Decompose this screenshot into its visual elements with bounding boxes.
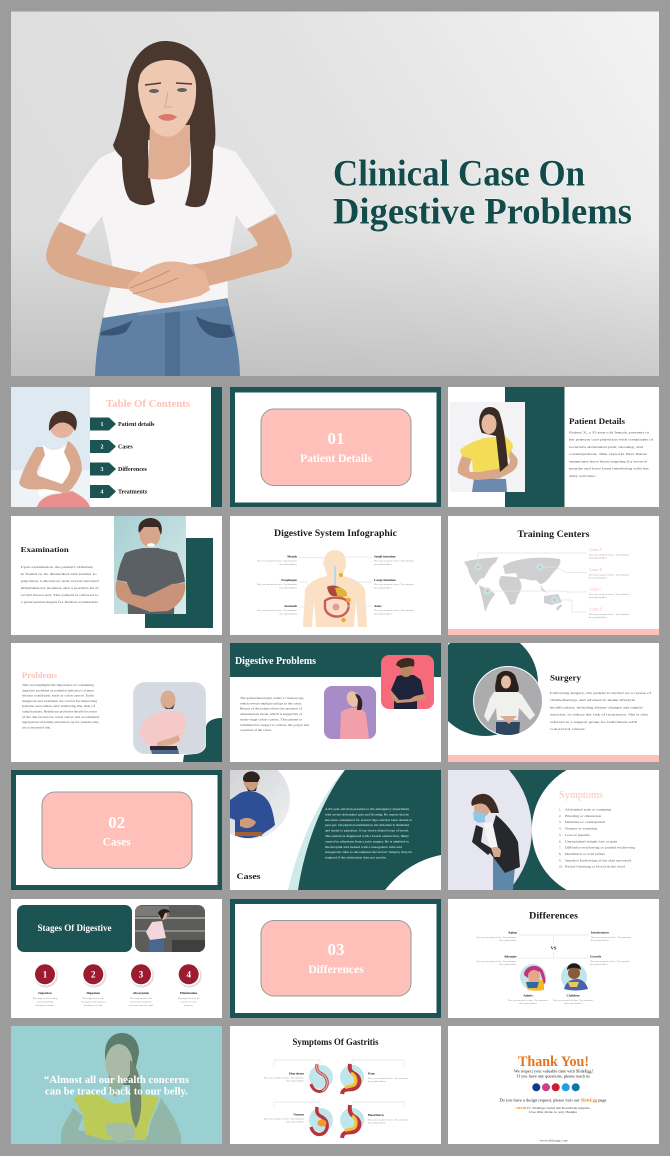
- paragraph: which reveals multiple polyps in the colon.: [240, 701, 302, 705]
- stage circles: 3: [139, 970, 144, 980]
- panel: patient details: Patient Details: [569, 416, 626, 426]
- contents list: 1: [100, 422, 104, 428]
- symptom list: 2.: [559, 814, 562, 818]
- photo: woman with teal overlay: [61, 1033, 181, 1144]
- photo: man in grey t-shirt: [114, 516, 186, 614]
- paragraph: are at increased risk.: [22, 725, 51, 729]
- paragraph: A 65-year-old man presents to the emergency department: [325, 807, 409, 811]
- paragraph: required if the obstruction does not resolve.: [325, 856, 387, 860]
- labels: Here you can put text here. Try customize: [368, 1118, 408, 1122]
- contents list: Differences: [118, 467, 148, 473]
- labels: Here you can put text here. Try customize: [264, 1076, 304, 1080]
- title: Clinical Case On: [333, 154, 585, 194]
- avatar captions: Children: [567, 994, 580, 998]
- center labels: Here you can put text here. Try customize: [589, 554, 629, 556]
- panel: digestive system infographic: Digestive System Infographic: [274, 529, 397, 539]
- contents list: Cases: [118, 445, 133, 451]
- panel: thank you: Thank You!: [518, 1054, 589, 1070]
- panel: problems: [11, 643, 222, 762]
- labels: these placeholders: [499, 963, 517, 966]
- paragraph: [569, 430, 654, 478]
- paragraph: adenomatous tissue, which is suggestive of: [240, 712, 303, 717]
- paragraph: chemotherapy and advised to make lifestyle: [550, 698, 636, 702]
- paragraph: [550, 691, 652, 731]
- panel: section 03 divider: [230, 899, 441, 1018]
- connector brackets: [274, 1060, 404, 1108]
- photo: woman with face mask: [471, 794, 520, 890]
- paragraph: daily activities.: [569, 474, 596, 478]
- photo: man in blue sweater: [230, 771, 275, 838]
- paragraph: her primary care physician with complaints of: [569, 438, 654, 442]
- center labels: Center B: [589, 568, 602, 572]
- labels: these placeholders: [368, 1080, 386, 1083]
- contents list: 2: [100, 445, 104, 451]
- panel: surgery: [448, 643, 659, 762]
- panel: thank you: Do you have a design request, please visit our SlideEgg page: [500, 1098, 607, 1104]
- comparison lines: [518, 935, 589, 958]
- photo: woman on purple: [324, 686, 376, 739]
- labels: Diarrhoea: [289, 1072, 304, 1076]
- panel: section 03 divider: Differences: [308, 964, 364, 976]
- stage labels: Ingestion: [38, 991, 52, 995]
- paragraph: digestive problems as potential indicators of more: [22, 688, 95, 692]
- contents list: [90, 418, 155, 498]
- labels right: these placeholders: [374, 563, 392, 566]
- icon: stomach nausea: [309, 1107, 333, 1134]
- labels: Intolerances: [591, 930, 610, 934]
- paragraph: [21, 565, 99, 604]
- map markers: [474, 563, 558, 604]
- panel: thank you: We respect your valuable time with SlideEgg!: [514, 1070, 593, 1074]
- heading: Table Of Contents: [106, 399, 190, 410]
- stage labels: through the mouth.: [36, 1004, 55, 1007]
- avatar captions: [508, 994, 593, 1005]
- panel: section 02 divider: 02: [108, 813, 125, 832]
- labels: these placeholders: [499, 939, 517, 942]
- labels: Here you can put text here. Try customize: [477, 960, 517, 963]
- labels right: these placeholders: [374, 612, 392, 616]
- stage labels: This stage involves the: [130, 997, 152, 1000]
- labels: Here you can put text here. Try customize: [590, 960, 630, 963]
- labels right: [374, 554, 414, 616]
- panel: quote: can be traced back to our belly.: [45, 1086, 189, 1098]
- body diagram: [303, 550, 367, 627]
- panel: cases: [230, 770, 441, 890]
- panel: stages of digestive: Stages Of Digestive: [38, 923, 112, 933]
- paragraph: inflammatory markers and a positive fecal: [21, 586, 99, 590]
- paragraph: [240, 696, 310, 732]
- labels left: [257, 554, 298, 616]
- stage labels: and water from the small: [129, 1004, 153, 1007]
- stage labels: products.: [184, 1004, 194, 1007]
- labels right: Here you can put text here. Try customize: [374, 560, 414, 562]
- social icons: [532, 1083, 580, 1091]
- paragraph: colorectal cancer.: [550, 727, 586, 731]
- paragraph: Biopsy of the polyps shows the presence of: [240, 707, 303, 711]
- labels left: Stomach: [284, 604, 297, 608]
- paragraph: of the risk factors for colon cancer and recommend: [22, 715, 100, 719]
- paragraph: The gastroenterologist orders a colonoscopy,: [240, 696, 304, 701]
- avatar captions: Here you can put text here. Try customize: [553, 999, 593, 1002]
- photo: woman holding stomach: [46, 41, 292, 376]
- avatar captions: these placeholders: [519, 1002, 537, 1005]
- labels: Here you can put text here. Try customize: [477, 936, 517, 939]
- labels left: Here you can put text here. Try customize: [257, 609, 297, 612]
- symptom list: 5.: [559, 833, 562, 837]
- symptom list: 10.: [559, 865, 563, 869]
- panel: section 01 divider: Patient Details: [300, 453, 372, 465]
- paragraph: Upon examination, the patient's abdomen: [21, 565, 93, 570]
- center labels: Here you can put text here. Try customize: [589, 613, 629, 616]
- labels right: Anus: [374, 604, 382, 608]
- photo: woman in white top: [11, 387, 90, 507]
- center labels: Here you can put text here. Try customize: [589, 574, 629, 576]
- panel: differences: VS: [551, 946, 557, 950]
- center labels: Center D: [589, 608, 602, 612]
- symptom list: [559, 808, 636, 869]
- contents list: 4: [100, 490, 104, 496]
- symptom list: 9.: [559, 858, 562, 862]
- photo: bald man: [132, 682, 206, 754]
- panel: digestive system infographic: [230, 516, 441, 635]
- panel: cases: Cases: [236, 872, 260, 881]
- paragraph: nasogastric tube to decompress the bowel. Surgery may be: [325, 850, 413, 854]
- symptom list: 1.: [559, 808, 562, 812]
- panel: differences: Differences: [529, 912, 578, 922]
- photo: man on pink: [381, 655, 434, 709]
- stage labels: Elimination: [180, 991, 197, 995]
- paragraph: early-stage colon cancer. The patient is: [240, 718, 303, 722]
- paragraph: The patient is diagnosed with a bowel obstruction, likely: [325, 834, 410, 839]
- labels: Here you can put text here. Try customize: [264, 1118, 304, 1120]
- center labels: these placeholders: [589, 576, 607, 580]
- paragraph: diagnosis and treatment are crucial for improving: [22, 699, 98, 703]
- stage labels: Absorption: [133, 991, 149, 995]
- symptom list: 4.: [559, 827, 562, 831]
- contents list: Treatments: [118, 490, 148, 496]
- symptom list: Unexplained weight loss or gain: [565, 839, 618, 843]
- symptom list: Loss of appetite: [565, 833, 591, 837]
- panel: differences: [448, 899, 659, 1018]
- symptom list: Abdominal pain or cramping: [565, 808, 612, 812]
- symptom list: 8.: [559, 852, 562, 856]
- labels: [264, 1072, 408, 1124]
- connector lines: [478, 553, 587, 612]
- paragraph: scheduled for surgery to remove the polyps and: [240, 723, 310, 727]
- paragraph: patient outcomes and reducing the risk of: [22, 704, 96, 708]
- contents list: Patient details: [118, 422, 155, 428]
- panel: thank you: If you have any questions, please reach us: [517, 1074, 591, 1080]
- panel: examination: [11, 516, 222, 635]
- labels: Heartburn: [368, 1113, 384, 1117]
- paragraph: serious conditions, such as colon cancer. Early: [22, 694, 95, 699]
- center labels: these placeholders: [589, 556, 607, 560]
- panel: patient details: [448, 387, 659, 507]
- panel: thank you: Use this slide to say thanks: [529, 1111, 577, 1114]
- labels: these placeholders: [591, 939, 609, 942]
- panel: surgery: Surgery: [550, 674, 581, 683]
- symptom list: Nausea or vomiting: [565, 827, 598, 831]
- panel: digestive problems: Digestive Problems: [235, 656, 316, 667]
- symptom list: Difficulty swallowing or painful swallowing: [565, 846, 636, 850]
- panel: symptoms of gastritis: Symptoms Of Gastritis: [292, 1037, 379, 1047]
- world map: [464, 557, 562, 612]
- paragraph: exercise, to reduce her risk of recurrence. She is also: [550, 713, 649, 718]
- labels: Aging: [508, 930, 517, 934]
- symptom list: 3.: [559, 820, 562, 824]
- symptom list: Diarrhea or constipation: [565, 820, 606, 824]
- labels: these placeholders: [368, 1122, 386, 1124]
- panel: problems: Problems: [22, 670, 58, 680]
- panel: section 01 divider: 01: [328, 429, 344, 448]
- labels left: these placeholders: [279, 586, 297, 590]
- panel: section 02 divider: [11, 770, 222, 890]
- paragraph: referred to a support group for individuals with: [550, 720, 638, 724]
- center labels: these placeholders: [589, 596, 607, 599]
- photo: woman in kitchen: [135, 905, 205, 952]
- icon: stomach pain: [340, 1064, 364, 1094]
- paragraph: has been constipated for several days and has been unable to: [325, 818, 413, 822]
- symptom list: 7.: [559, 846, 562, 850]
- contents list: 3: [100, 467, 104, 473]
- paragraph: complications. Healthcare providers should be aware: [22, 710, 98, 714]
- center labels: Center A: [589, 548, 602, 552]
- labels left: these placeholders: [279, 612, 297, 616]
- labels right: Here you can put text here. Try customize: [374, 583, 414, 586]
- center labels: these placeholders: [589, 616, 607, 619]
- paragraph: modifications, including dietary changes and regular: [550, 705, 643, 710]
- center labels: Here you can put text here. Try customize: [589, 593, 629, 596]
- paragraph: and tender to palpation. X-ray shows dilated loops of bowel.: [325, 829, 409, 833]
- panel: table of contents: [11, 387, 222, 507]
- panel: training centers: Training Centers: [518, 530, 590, 540]
- panel: quote: [11, 1026, 222, 1144]
- panel: symptoms: Symptoms: [559, 790, 603, 801]
- symptom list: Heartburn or acid reflux: [565, 852, 606, 856]
- paragraph: the hospital and treated with a nasogastric tube and: [325, 845, 403, 849]
- paragraph: appropriate screening and follow-up for patients who: [22, 720, 100, 724]
- stage labels: Digestion: [87, 991, 100, 995]
- avatar captions: Adults: [523, 994, 533, 998]
- stage circles: 2: [91, 970, 96, 980]
- symptom list: Rectal bleeding or blood in the stool: [565, 865, 625, 869]
- paragraph: with severe abdominal pain and bloating. He reports that he: [325, 812, 410, 816]
- labels right: these placeholders: [374, 586, 392, 590]
- labels: Allergies: [504, 954, 517, 958]
- panel: section 02 divider: Cases: [103, 836, 131, 848]
- paragraph: symptoms have been ongoing for several: [569, 460, 647, 464]
- symptom list: Bloating or distension: [565, 814, 602, 818]
- labels: these placeholders: [286, 1120, 304, 1124]
- paragraph: recurrent abdominal pain, bloating, and: [569, 445, 644, 450]
- paragraph: pass gas. On physical examination, his abdomen is distended: [325, 823, 409, 828]
- panel: thank you: [448, 1026, 659, 1144]
- panel: symptoms of gastritis: [230, 1026, 441, 1144]
- paragraph: Patient X, a 35-year-old female, presents to: [569, 430, 650, 436]
- panel: quote: “Almost all our health concerns: [44, 1075, 189, 1086]
- stage labels: [32, 991, 200, 1007]
- labels right: Small intestine: [374, 554, 396, 558]
- paragraph: months and have been interfering with her: [569, 467, 649, 471]
- labels left: Mouth: [287, 554, 297, 558]
- avatar captions: these placeholders: [564, 1002, 582, 1005]
- panel: thank you: www.slideegg.com: [540, 1138, 568, 1142]
- stage circles: [34, 963, 202, 988]
- paragraph: occult blood test. The patient is referred to: [21, 593, 99, 597]
- paragraph: Following surgery, the patient is started on a course of: [550, 691, 652, 696]
- labels: these placeholders: [590, 963, 608, 966]
- icon: adult eating: [520, 964, 546, 991]
- paragraph: This case highlights the importance of considering: [22, 683, 95, 687]
- paragraph: a portion of the colon.: [240, 728, 272, 732]
- photo: woman in yellow top: [450, 402, 525, 492]
- connector lines: [299, 557, 372, 607]
- icon: child eating: [561, 963, 588, 990]
- labels left: Here you can put text here. Try customize: [257, 560, 297, 562]
- stage labels: removal of waste: [180, 1000, 197, 1004]
- stage labels: This stage involves the: [178, 997, 200, 1000]
- panel: thank you: CREDITS: SlideEgg created this PowerPoint template.: [516, 1107, 591, 1110]
- labels left: Esophagus: [281, 578, 298, 582]
- labels: these placeholders: [286, 1080, 304, 1082]
- labels left: these placeholders: [279, 563, 297, 566]
- center labels: [589, 548, 629, 619]
- labels: Growth: [590, 954, 601, 958]
- center labels: Center C: [589, 588, 602, 592]
- labels: Nausea: [293, 1112, 304, 1116]
- paragraph: is found to be distended and tender to: [21, 572, 97, 576]
- paragraph: caused by adhesions from a prior surgery. He is admitted to: [325, 839, 410, 843]
- panel: examination: Examination: [21, 545, 70, 554]
- panel: digestive problems: [230, 643, 441, 762]
- stage labels: mechanical and chemical: [81, 1000, 106, 1004]
- labels: [477, 930, 631, 966]
- stage circles: 1: [43, 970, 48, 980]
- panel: section 03 divider: 03: [328, 940, 344, 959]
- panel: section 01 divider: [230, 387, 441, 507]
- labels: Here you can put text here. Try customize: [591, 936, 631, 939]
- labels: Pain: [368, 1072, 375, 1076]
- labels right: Here you can put text here. Try customize: [374, 609, 414, 612]
- labels left: Here you can put text here. Try customize: [257, 583, 297, 586]
- labels: Here you can put text here. Try customize: [368, 1077, 408, 1080]
- icon: stomach heartburn: [340, 1105, 364, 1138]
- stage labels: This stage involves the: [82, 997, 104, 1000]
- paragraph: palpation. Laboratory tests reveal elevated: [21, 579, 99, 583]
- panel: symptoms: [448, 770, 659, 890]
- panel: training centers: [448, 516, 659, 635]
- paragraph: constipation. She reports that these: [569, 452, 648, 456]
- panel: hero title slide: Digestive Problems: [333, 192, 632, 232]
- stage labels: in food and drink: [37, 1000, 54, 1004]
- panel: hero title slide: [11, 12, 659, 376]
- icon: stomach diarrhoea: [309, 1064, 333, 1091]
- paragraph: a gastroenterologist for further evaluation.: [21, 600, 99, 604]
- paragraph: [325, 807, 413, 860]
- stage labels: movement of nutrients: [130, 1000, 152, 1004]
- symptom list: 6.: [559, 839, 562, 843]
- symptom list: Jaundice (yellowing of the skin and eyes): [565, 858, 631, 862]
- paragraph: [22, 683, 100, 729]
- panel: stages of digestive: [11, 899, 222, 1018]
- stage labels: breakdown of food.: [84, 1004, 103, 1007]
- stage labels: This stage involves taking: [32, 997, 58, 1000]
- avatar captions: Here you can put text here. Try customize: [508, 999, 548, 1002]
- photo: woman in white sweater: [473, 666, 542, 735]
- labels right: Large intestine: [374, 578, 396, 582]
- stage circles: 4: [186, 970, 191, 980]
